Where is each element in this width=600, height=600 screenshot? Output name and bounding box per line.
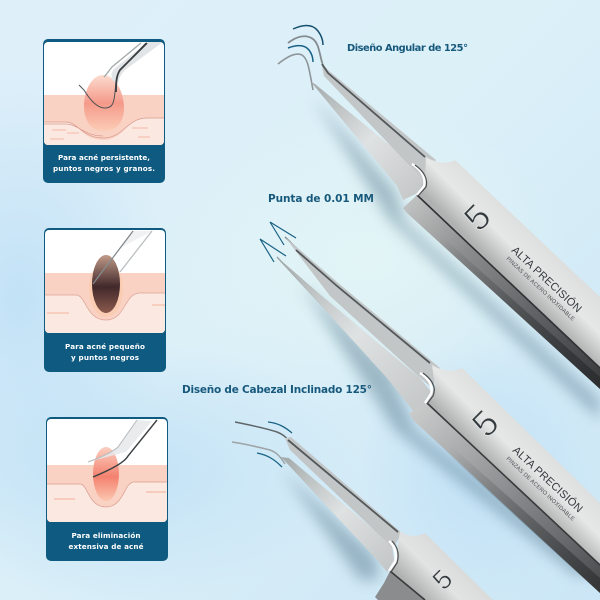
engraving: 5	[427, 564, 459, 596]
caption: Para acné pequeño	[65, 342, 145, 351]
illustration: straight tweezer on blackhead	[45, 230, 165, 333]
tweezer 1: angular hooks: ALTA PRECISIÓN	[509, 244, 584, 315]
collar highlight	[420, 373, 432, 403]
caption: Para acné persistente,	[58, 153, 150, 162]
tweezer 2: straight points	[260, 222, 600, 593]
lower arm	[281, 457, 394, 572]
tweezer 2: straight points: PINZAS DE ACERO INOXIDABLE	[505, 456, 575, 523]
dark bottom stripe	[432, 436, 600, 593]
bent tips	[232, 422, 292, 467]
engraving: 5	[456, 196, 499, 239]
lower arm	[311, 82, 426, 200]
panel: extensive acne	[46, 417, 168, 561]
caption: y puntos negros	[71, 353, 139, 362]
illustration: hooked tweezer on pimple	[44, 42, 164, 145]
heading: angular design: Diseño Angular de 125°	[347, 43, 468, 54]
hook tips	[278, 26, 323, 90]
heading: inclined head: Diseño de Cabezal Inclinado 125°	[182, 384, 372, 396]
heading: tip size: Punta de 0.01 MM	[268, 193, 374, 205]
handle lower face	[375, 571, 425, 600]
handle upper face	[390, 531, 493, 600]
caption: Para eliminación	[72, 531, 140, 540]
upper arm	[321, 62, 436, 178]
handle upper face	[427, 365, 600, 565]
tweezer 3: inclined head	[232, 422, 493, 600]
panel: small acne	[44, 228, 166, 372]
handle lower face	[403, 195, 600, 389]
handle lower face	[409, 403, 600, 593]
illustration: angled tweezer on pimple	[47, 419, 167, 522]
upper arm	[285, 237, 440, 388]
tweezer 2: straight points: ALTA PRECISIÓN	[510, 444, 585, 515]
pointed tips	[260, 222, 340, 314]
handle upper face	[417, 157, 600, 368]
panel: persistent acne	[43, 39, 165, 183]
collar highlight	[412, 164, 424, 195]
caption: puntos negros y granos.	[53, 164, 155, 173]
lower arm	[277, 257, 436, 412]
tweezer 1: angular hooks: PINZAS DE ACERO INOXIDABLE	[505, 256, 575, 323]
collar highlight	[389, 541, 396, 571]
caption: extensiva de acné	[68, 542, 144, 551]
dark bottom stripe	[425, 226, 600, 389]
tweezer 1: angular hooks	[278, 26, 600, 420]
engraving: 5	[464, 402, 507, 445]
upper arm	[285, 437, 402, 548]
